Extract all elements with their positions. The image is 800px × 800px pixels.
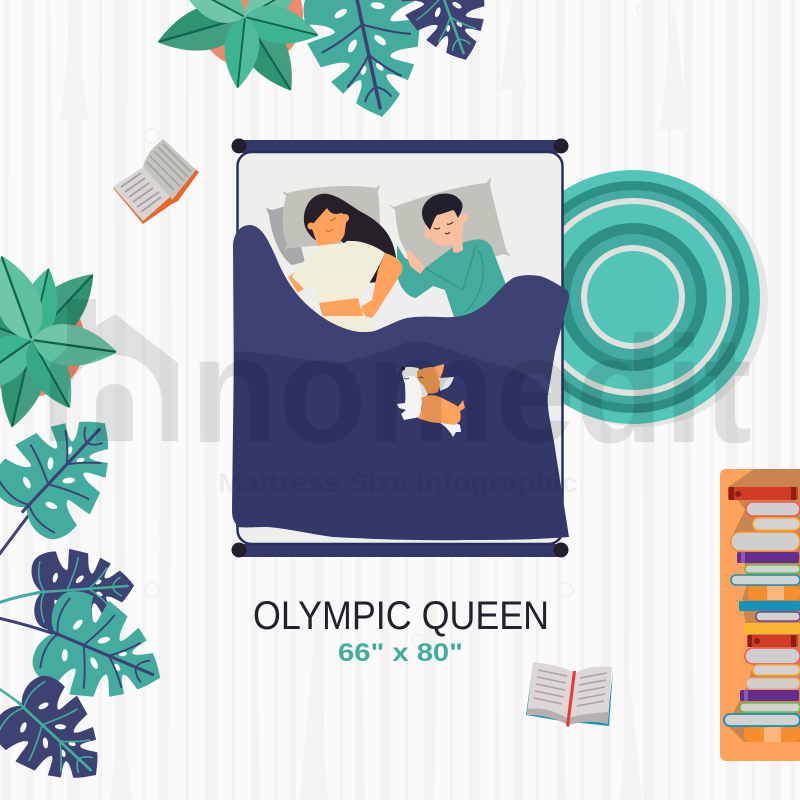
grey book green edge [745,565,800,573]
title: OLYMPIC QUEEN [253,594,549,638]
grey book red edge [746,502,800,516]
man hair [422,194,463,230]
grey book yellow edge [753,518,800,530]
text lines [534,670,607,706]
corgi white body [397,367,432,420]
stack of books [720,469,800,761]
second grey book yellow edge [753,665,800,675]
woman midriff [318,298,363,316]
mattress [238,152,562,544]
man [397,194,510,320]
second grey book blue edge [724,714,800,726]
blanket [232,225,569,540]
rug rings [506,170,760,424]
plant pot [197,0,303,68]
second grey book red edge [745,648,800,664]
page bottoms [527,708,608,725]
second purple book [740,690,799,701]
woman hair [304,194,396,283]
corgi head patch [417,367,440,394]
watermark [50,299,752,498]
book on woman [298,287,321,312]
book pages [527,662,575,722]
bed frame bars [238,140,562,153]
third grey book [746,678,800,689]
man head [420,200,468,250]
monstera leaf 1 [0,389,142,550]
dimensions: 66" x 80" [338,639,463,667]
top teal monstera leaf [296,0,439,129]
corgi tail [458,400,465,411]
text lines [121,144,191,212]
top navy monstera leaf [392,0,505,74]
top plant [151,0,323,102]
left plant [0,248,120,433]
monstera leaf 2 [30,544,137,634]
book cover [113,168,199,224]
stems [0,500,67,712]
man sweater [397,239,510,320]
man neck [452,236,463,253]
corgi rear paw [440,421,461,437]
watermark house logo [50,299,178,441]
woman face [311,208,347,246]
woman [288,194,403,334]
grey book orange edge [731,532,800,551]
rug shadow [514,173,768,427]
watermark subtitle: Mattress Size Infographic [218,467,578,498]
woman shirt [292,241,385,303]
blue book [739,601,800,611]
orange panel [720,469,800,761]
second red book [747,635,798,647]
leaves [0,248,120,433]
corgi body [418,395,461,425]
bed posts [232,138,568,558]
blanket lower panel [232,341,569,540]
left monstera leaves group [0,389,180,800]
woman arms [360,253,403,318]
book cover [526,664,613,727]
man hand [406,250,425,274]
corgi smile [404,377,423,379]
blanket upper fold [233,225,569,395]
bed [232,138,569,558]
leaves [151,0,323,102]
book pages [113,167,170,221]
watermark wordmark: nomedit [190,305,752,475]
rug [506,170,768,427]
second orange book [744,727,800,742]
open book bottom [526,662,613,727]
purple book [737,552,799,563]
pillows [266,177,511,280]
grey book purple edge [756,612,800,621]
corgi [397,364,465,437]
orange book [748,586,800,600]
plant pot [0,287,85,397]
stack shadows [727,469,800,742]
monstera leaf 4 [0,666,127,800]
open book top left [113,139,199,224]
red ribbon [566,671,576,727]
woman pants [318,312,377,334]
second grey book green edge [740,703,800,712]
corgi ears [430,364,444,380]
grey book blue edge [731,575,800,585]
red book [728,487,798,500]
monstera leaf 3 [25,582,180,725]
corgi nose [401,366,405,370]
man face details [434,222,453,234]
yellow book [744,623,800,634]
